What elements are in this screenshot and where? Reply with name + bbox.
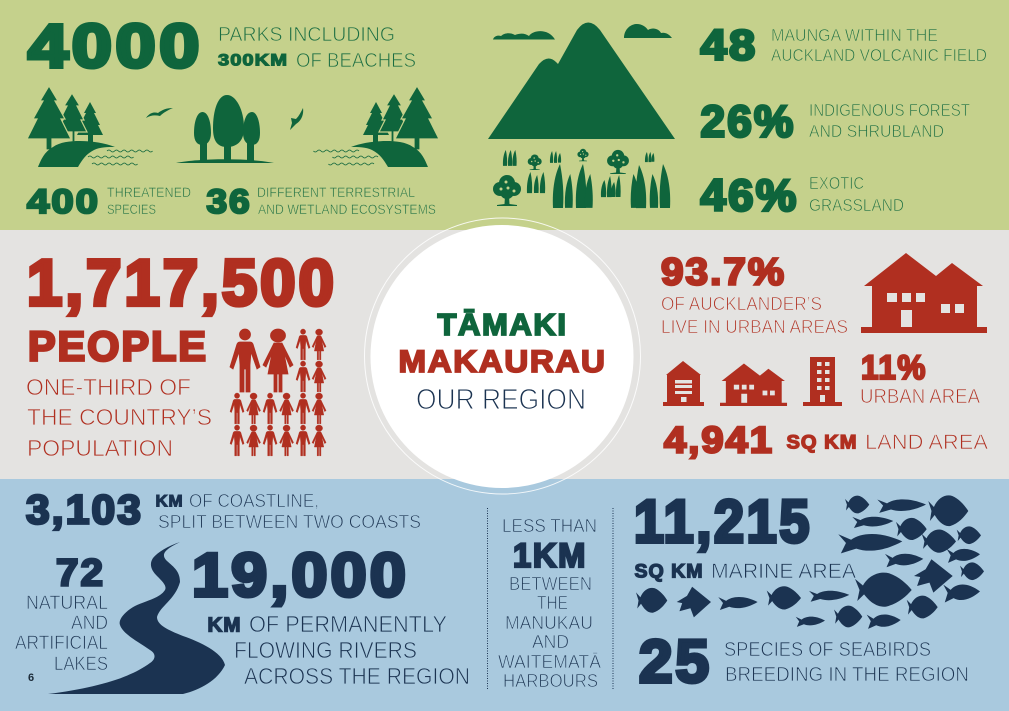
stat: 11% urban area: URBAN AREA (860, 385, 980, 408)
icon: school of fish (636, 495, 984, 629)
stat: 48 maunga: AUCKLAND VOLCANIC FIELD (771, 45, 987, 65)
stat: 36 ecosystems (206, 183, 436, 221)
stat: 19,000 km rivers: 19,000 (192, 541, 409, 609)
stat: less than 1km between harbours: WAITEMATĀ (498, 652, 601, 672)
icon: flying bird left (146, 108, 173, 118)
icon: right pine trees and bay (313, 86, 439, 167)
stat: 1,717,500 people: ONE-THIRD OF (26, 374, 191, 400)
stat: 25 seabird species: BREEDING IN THE REGION (725, 664, 969, 686)
page number: 6 (28, 672, 35, 684)
stat: 93.7% urban living: LIVE IN URBAN AREAS (661, 316, 848, 337)
stat: 19,000 km rivers (192, 541, 470, 689)
stat: 36 ecosystems: 36 (206, 183, 252, 221)
stat: less than 1km between harbours: HARBOURS (503, 671, 598, 691)
stat: 1,717,500 people: PEOPLE (28, 323, 208, 370)
stat: less than 1km between harbours (488, 508, 613, 691)
stat: 1,717,500 people (26, 246, 337, 461)
stat: 4000 parks (28, 12, 416, 80)
stat: 4,941 sq km land area: 4,941 (664, 420, 774, 461)
stat: 19,000 km rivers: OF PERMANENTLY (249, 611, 447, 637)
stat: 48 maunga: MAUNGA WITHIN THE (771, 25, 938, 45)
stat: 1,717,500 people: POPULATION (27, 435, 173, 461)
stat: 72 lakes: 72 (56, 553, 105, 595)
icon: small house (720, 363, 787, 406)
stat: 4000 parks: PARKS INCLUDING (218, 24, 395, 46)
stat: 48 maunga: 48 (700, 22, 758, 70)
stat: 4000 parks: OF BEACHES (296, 50, 416, 72)
icon: central trees (176, 95, 274, 163)
stat: 19,000 km rivers: KM (208, 614, 242, 636)
stat: 1,717,500 people: THE COUNTRY’S (27, 404, 212, 430)
stat: 26% indigenous forest: AND SHRUBLAND (809, 121, 944, 141)
stat: 72 lakes (15, 553, 108, 675)
stat: 3,103 km coastline (26, 487, 421, 533)
stat: less than 1km between harbours: MANUKAU (505, 613, 593, 633)
stat: 400 threatened species: SPECIES (107, 202, 156, 217)
stat: 19,000 km rivers: ACROSS THE REGION (244, 663, 470, 689)
stat: 93.7% urban living: 93.7% (661, 252, 786, 294)
panel: water and marine (0, 479, 1009, 711)
stat: 11,215 sq km marine area: SQ KM (634, 561, 704, 582)
icon: grasses and shrubs (493, 149, 670, 208)
stat: less than 1km between harbours: THE (537, 593, 568, 613)
stat: 36 ecosystems: AND WETLAND ECOSYSTEMS (258, 202, 436, 217)
stat: 93.7% urban living: OF AUCKLANDER’S (661, 293, 822, 314)
stat: 3,103 km coastline: KM (156, 492, 184, 510)
stat: 93.7% urban living (661, 252, 848, 337)
icon: apartment building (803, 357, 842, 406)
stat: 11,215 sq km marine area: 11,215 (634, 488, 812, 555)
stat: 46% exotic grassland (700, 172, 904, 220)
stat: 4000 parks: 300KM (218, 52, 288, 70)
stat: 3,103 km coastline: OF COASTLINE, (189, 490, 319, 511)
stat: 11,215 sq km marine area: MARINE AREA (711, 560, 856, 583)
central title circle (364, 218, 640, 494)
stat: less than 1km between harbours: BETWEEN (509, 574, 592, 594)
stat: 11,215 sq km marine area (634, 488, 856, 583)
stat: 1,717,500 people: 1,717,500 (27, 246, 337, 319)
stat: 72 lakes: NATURAL (26, 592, 108, 614)
stat: 4,941 sq km land area: SQ KM (786, 432, 858, 453)
stat: 400 threatened species: THREATENED (107, 185, 191, 200)
stat: 11% urban area (860, 349, 980, 408)
stat: 26% indigenous forest (700, 98, 970, 146)
stat: 400 threatened species (27, 183, 191, 221)
stat: 11% urban area: 11% (861, 349, 927, 387)
stat: 4,941 sq km land area: LAND AREA (865, 431, 988, 454)
stat: 46% exotic grassland: 46% (700, 172, 798, 220)
central title circle: OUR REGION (416, 384, 586, 416)
icon: flying bird right (290, 108, 303, 130)
stat: 26% indigenous forest: 26% (700, 98, 796, 146)
stat: 48 maunga (700, 22, 987, 70)
stat: 4000 parks: 4000 (28, 12, 203, 80)
icon: garage house (663, 361, 704, 406)
stat: 72 lakes: LAKES (54, 653, 108, 675)
icon: left pine trees and bay (27, 86, 153, 167)
stat: 400 threatened species: 400 (27, 183, 100, 221)
icon: river (48, 542, 225, 694)
central title circle: MAKAURAU (398, 343, 606, 379)
stat: less than 1km between harbours: LESS THAN (502, 516, 597, 536)
stat: 3,103 km coastline: SPLIT BETWEEN TWO COASTS (158, 511, 421, 532)
stat: 25 seabird species (639, 628, 969, 695)
central title circle: TĀMAKI (438, 307, 568, 342)
stat: 25 seabird species: 25 (639, 628, 712, 695)
stat: 46% exotic grassland: EXOTIC (809, 173, 864, 193)
stat: 72 lakes: AND (71, 612, 108, 634)
stat: 36 ecosystems: DIFFERENT TERRESTRIAL (257, 185, 415, 200)
stat: less than 1km between harbours: AND (532, 632, 569, 652)
icon: large house (861, 253, 987, 333)
stat: 46% exotic grassland: GRASSLAND (809, 195, 904, 215)
stat: 26% indigenous forest: INDIGENOUS FOREST (809, 100, 970, 120)
stat: 4,941 sq km land area (664, 420, 988, 461)
stat: less than 1km between harbours: 1KM (513, 537, 587, 575)
icon: mountain with clouds (488, 22, 675, 139)
stat: 25 seabird species: SPECIES OF SEABIRDS (724, 639, 931, 661)
stat: 19,000 km rivers: FLOWING RIVERS (234, 637, 417, 663)
panel: parks and environment (0, 0, 1009, 230)
icon: population figures (230, 329, 326, 456)
stat: 3,103 km coastline: 3,103 (26, 487, 143, 533)
stat: 72 lakes: ARTIFICIAL (15, 632, 108, 654)
panel: people and urban (0, 230, 1009, 479)
